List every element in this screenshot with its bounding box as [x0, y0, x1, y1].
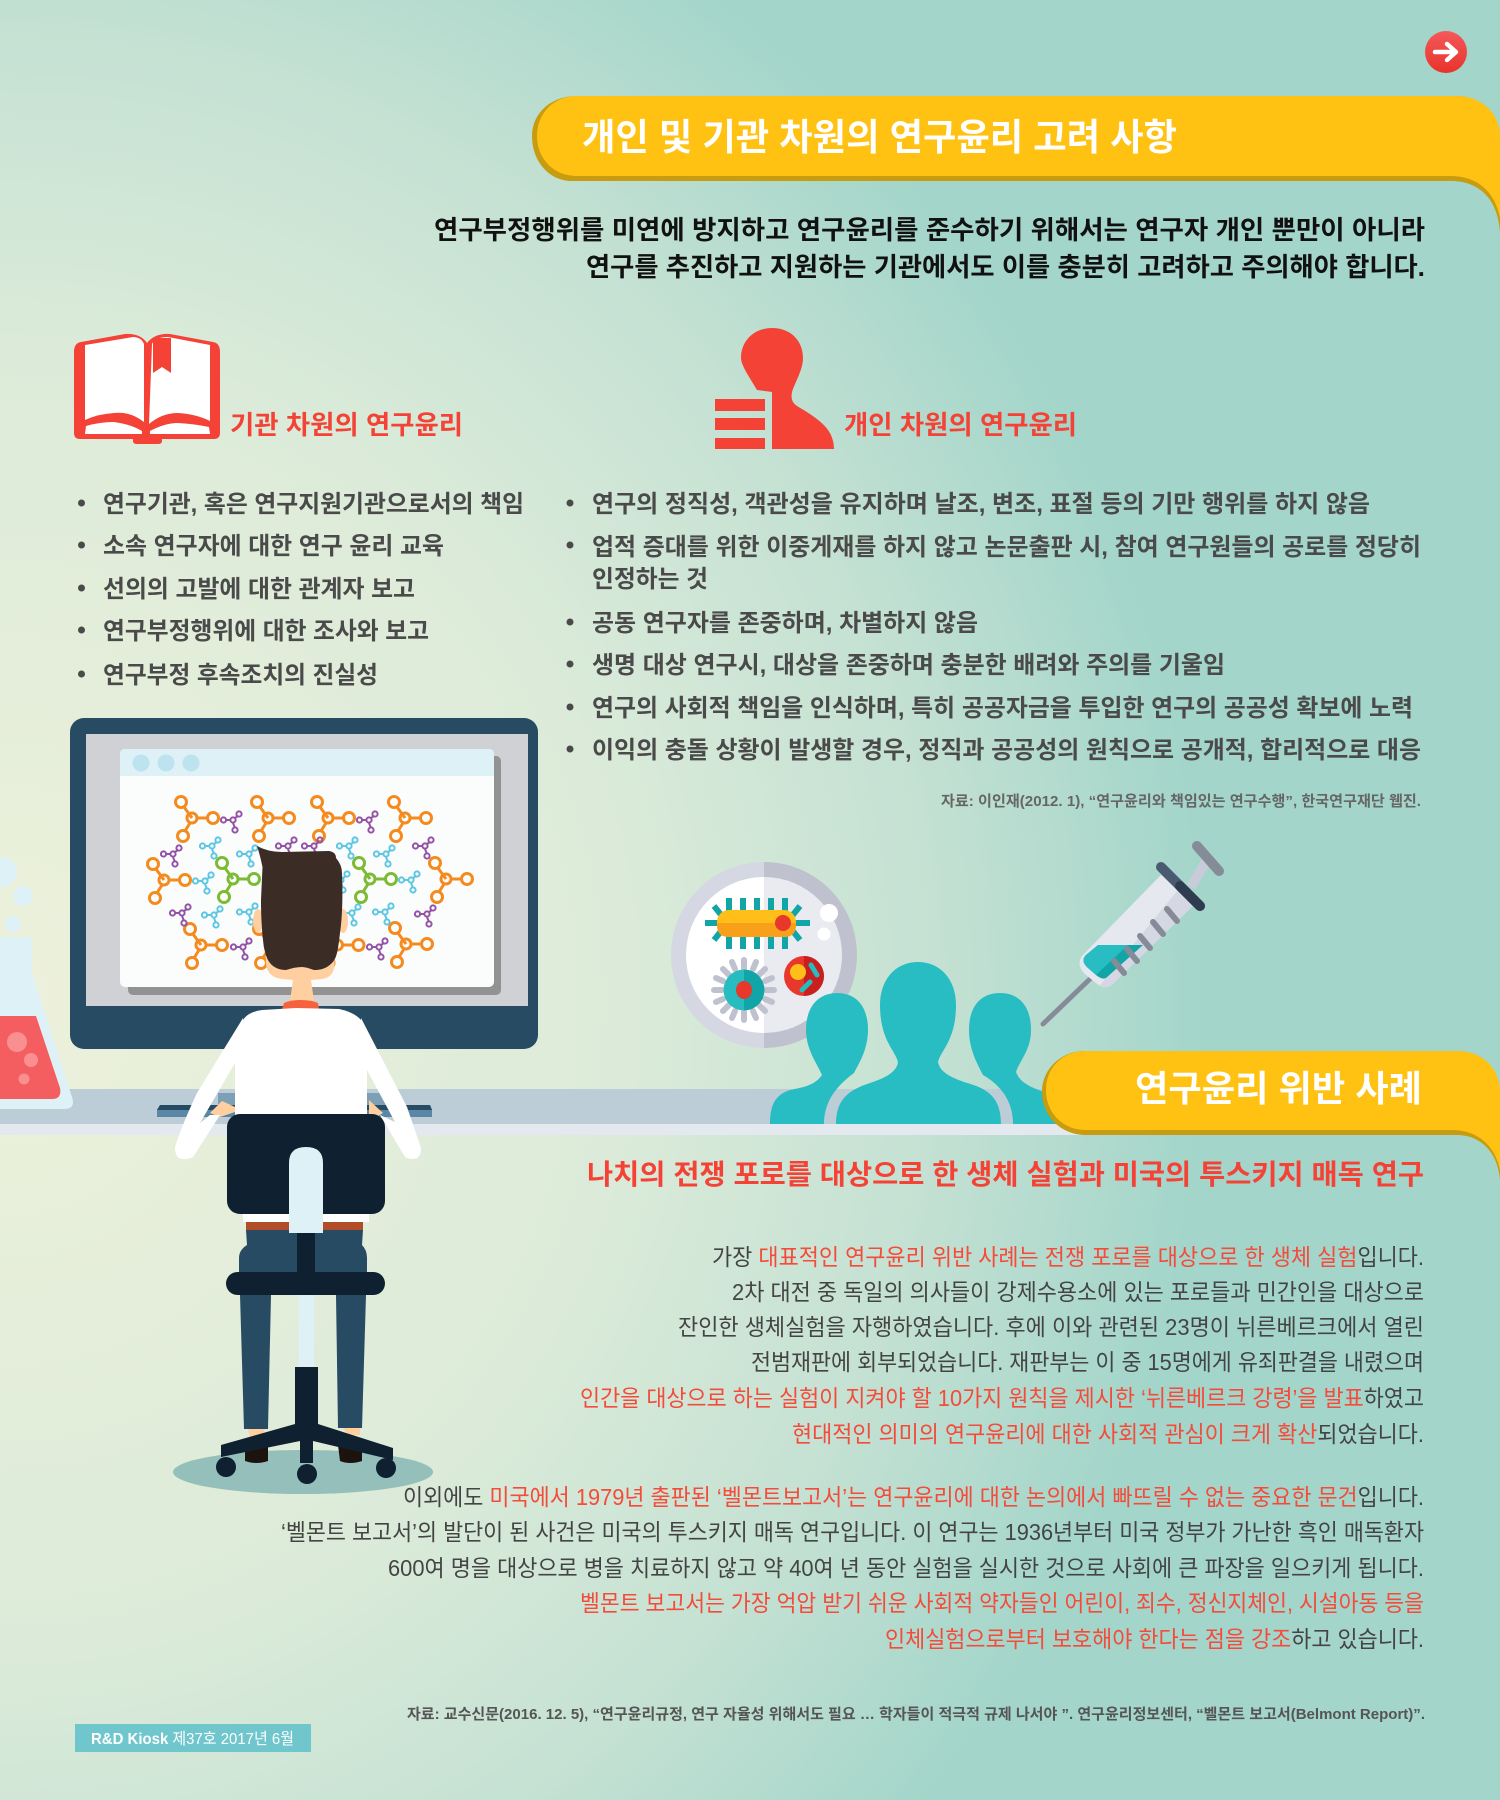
person on chair	[173, 846, 433, 1494]
monitor	[70, 718, 538, 1049]
keyboard	[157, 1093, 432, 1117]
list: institution ethics: 선의의 고발에 대한 관계자 보고	[103, 576, 415, 603]
body paragraph 1: 전범재판에 회부되었습니다. 재판부는 이 중 15명에게 유죄판결을 내렸으며	[751, 1349, 1424, 1375]
molecules	[148, 796, 472, 968]
feet	[248, 1429, 265, 1437]
source note 1: 자료: 이인재(2012. 1), “연구윤리와 책임있는 연구수행”, 한국연구재단 웹진.	[941, 793, 1421, 810]
list: individual ethics: 공동 연구자를 존중하며, 차별하지 않음	[592, 610, 978, 637]
body paragraph 1: 인간을 대상으로 하는 실험이 지켜야 할 10가지 원칙을 제시한 ‘뉘른베르크 강령’을 발표하였고	[580, 1385, 1424, 1411]
hair	[257, 846, 342, 970]
body paragraph 2: ‘벨몬트 보고서’의 발단이 된 사건은 미국의 투스키지 매독 연구입니다. 이 연구는 1936년부터 미국 정부가 가난한 흑인 매독환자	[281, 1519, 1424, 1545]
list: institution ethics: 소속 연구자에 대한 연구 윤리 교육	[103, 533, 444, 560]
collar	[282, 1000, 319, 1009]
issue badge	[75, 1724, 311, 1752]
icon: open book	[74, 334, 220, 444]
chair	[216, 1114, 396, 1484]
arrow button	[1425, 31, 1467, 73]
body paragraph 1: 가장 대표적인 연구윤리 위반 사례는 전쟁 포로를 대상으로 한 생체 실험입니다.	[712, 1244, 1424, 1270]
list: individual ethics: 연구의 사회적 책임을 인식하며, 특히 공공자금을 투입한 연구의 공공성 확보에 노력	[592, 695, 1413, 722]
syringe	[1043, 846, 1219, 1024]
virus	[714, 960, 774, 1020]
list: individual ethics: 업적 증대를 위한 이중게재를 하지 않고 논문출판 시, 참여 연구원들의 공로를 정당히	[592, 534, 1421, 561]
bacterium	[705, 898, 810, 949]
icon: person with lines	[715, 328, 834, 449]
body paragraph 1: 2차 대전 중 독일의 의사들이 강제수용소에 있는 포로들과 민간인을 대상으로	[732, 1279, 1424, 1305]
list: individual ethics: 이익의 충돌 상황이 발생할 경우, 정직과 공공성의 원칙으로 공개적, 합리적으로 대응	[592, 737, 1421, 764]
intro text: 연구를 추진하고 지원하는 기관에서도 이를 충분히 고려하고 주의해야 합니다.	[586, 252, 1425, 282]
source note 2: 자료: 교수신문(2016. 12. 5), “연구윤리규정, 연구 자율성 위해서도 필요 … 학자들이 적극적 규제 나서야 ”. 연구윤리정보센터, “벨몬트 보고서(Belmont Report)”.	[407, 1706, 1425, 1723]
list: individual ethics: 생명 대상 연구시, 대상을 존중하며 충분한 배려와 주의를 기울임	[592, 652, 1225, 679]
case heading: 나치의 전쟁 포로를 대상으로 한 생체 실험과 미국의 투스키지 매독 연구	[587, 1159, 1424, 1190]
section banner: violation cases: 연구윤리 위반 사례	[1135, 1068, 1422, 1109]
heading: individual ethics: 개인 차원의 연구윤리	[844, 410, 1077, 440]
body paragraph 2: 인체실험으로부터 보호해야 한다는 점을 강조하고 있습니다.	[885, 1626, 1424, 1652]
body paragraph 2: 벨몬트 보고서는 가장 억압 받기 쉬운 사회적 약자들인 어린이, 죄수, 정신지체인, 시설아동 등을	[580, 1590, 1424, 1616]
intro text: 연구부정행위를 미연에 방지하고 연구윤리를 준수하기 위해서는 연구자 개인 뿐만이 아니라	[434, 215, 1425, 245]
body paragraph 1: 잔인한 생체실험을 자행하였습니다. 후에 이와 관련된 23명이 뉘른베르크에서 열린	[678, 1314, 1424, 1340]
list: institution ethics: 연구부정 후속조치의 진실성	[103, 662, 378, 689]
issue badge: R&D Kiosk 제37호 2017년 6월	[91, 1730, 294, 1748]
intro text	[434, 215, 1425, 282]
body paragraph 2: 600여 명을 대상으로 병을 치료하지 않고 약 40여 년 동안 실험을 실시한 것으로 사회에 큰 파장을 일으키게 됩니다.	[388, 1555, 1424, 1581]
people silhouettes	[770, 962, 1065, 1124]
white shirt	[175, 1008, 421, 1222]
list: institution ethics: 연구부정행위에 대한 조사와 보고	[103, 618, 429, 645]
section banner: violation cases	[1042, 1051, 1500, 1180]
body paragraph 1: 현대적인 의미의 연구윤리에 대한 사회적 관심이 크게 확산되었습니다.	[792, 1421, 1424, 1447]
list: institution ethics: 연구기관, 혹은 연구지원기관으로서의 책임	[103, 491, 524, 518]
title banner	[532, 96, 1500, 232]
trousers	[239, 1230, 367, 1272]
list: individual ethics: 연구의 정직성, 객관성을 유지하며 날조, 변조, 표절 등의 기만 행위를 하지 않음	[592, 491, 1370, 518]
list: individual ethics: 인정하는 것	[592, 566, 708, 593]
desk	[0, 1089, 1100, 1135]
body paragraph 1	[580, 1244, 1424, 1447]
body paragraph 2	[281, 1484, 1424, 1652]
body paragraph 2: 이외에도 미국에서 1979년 출판된 ‘벨몬트보고서’는 연구윤리에 대한 논의에서 빠뜨릴 수 없는 중요한 문건입니다.	[403, 1484, 1424, 1510]
list: individual ethics	[566, 491, 1421, 764]
title banner: 개인 및 기관 차원의 연구윤리 고려 사항	[582, 117, 1177, 158]
hands	[210, 1100, 383, 1118]
list: institution ethics	[78, 491, 524, 689]
red cell	[784, 956, 824, 996]
ears and neck	[253, 909, 348, 1001]
flask	[0, 857, 73, 1109]
petri dish	[671, 862, 857, 1048]
heading: institution ethics: 기관 차원의 연구윤리	[230, 410, 463, 440]
